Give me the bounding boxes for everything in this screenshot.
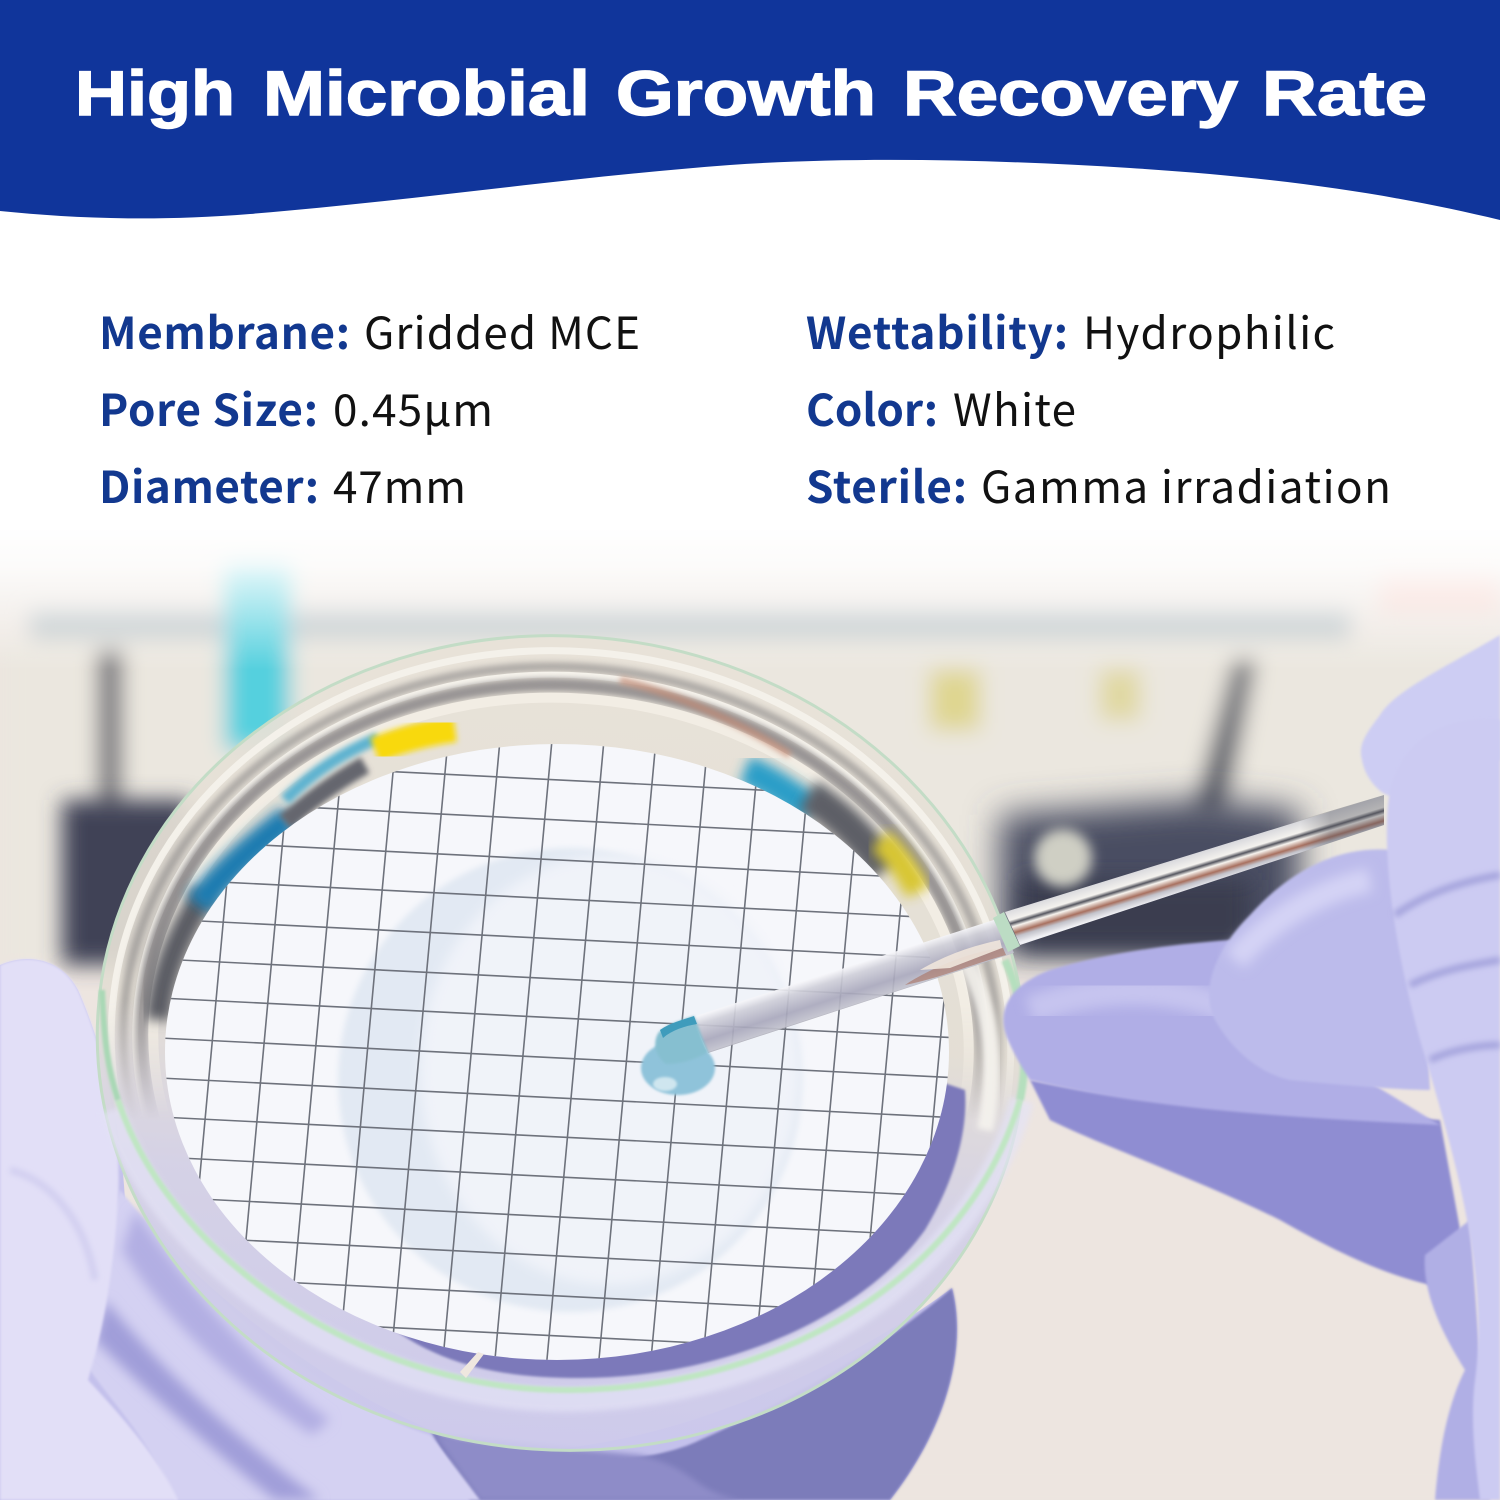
colored reflections in the rim (158, 893, 205, 1020)
spec: wettability: Wettability: (806, 298, 1068, 362)
spec: diameter: Diameter: (99, 452, 319, 516)
title: Microbial (263, 59, 590, 129)
spec: membrane: Gridded MCE (364, 298, 640, 362)
spec: wettability: Hydrophilic (1083, 298, 1335, 362)
title: Growth (616, 59, 876, 129)
spec: diameter (99, 452, 466, 516)
title: Rate (1262, 59, 1427, 129)
photo background: blurred laboratory (0, 525, 1500, 1500)
glass pipette (641, 795, 1384, 1095)
spec: diameter: 47mm (333, 452, 466, 516)
header banner (0, 0, 1500, 220)
upper glass streaks (108, 647, 1014, 1106)
dish rims (70, 605, 1052, 1481)
right glove (1003, 635, 1500, 1500)
thumb (1209, 849, 1430, 1090)
liquid droplet (641, 1041, 715, 1095)
large pale finger (1387, 719, 1500, 1500)
lower palm fingers (1030, 1080, 1462, 1288)
middle finger (1003, 940, 1440, 1125)
title (75, 59, 1427, 129)
spec: membrane: Membrane: (99, 298, 350, 362)
spec: pore size: 0.45μm (333, 375, 493, 439)
spec: pore size (99, 375, 493, 439)
tapered glass tube (692, 918, 1014, 1053)
petri dish (96, 634, 1032, 1452)
spec: color: Color: (806, 375, 938, 439)
specifications (99, 298, 1391, 516)
wet spot (338, 848, 802, 1312)
spec: membrane (99, 298, 640, 362)
glass shard reflection (460, 1352, 484, 1378)
green collar (993, 912, 1020, 952)
spec: sterile: Sterile: (806, 452, 967, 516)
knuckle (1361, 635, 1500, 796)
spec: color (806, 375, 1076, 439)
spec: color: White (953, 375, 1076, 439)
left glove under the dish (0, 959, 957, 1500)
membrane grid (165, 744, 949, 1360)
pipette rod (1005, 795, 1384, 945)
title: High (75, 59, 235, 129)
dish body (70, 605, 1052, 1481)
spec: wettability (806, 298, 1335, 362)
spec: sterile: Gamma irradiation (981, 452, 1391, 516)
dark reflection of fingers around the membrane (370, 1080, 965, 1378)
spec: pore size: Pore Size: (99, 375, 318, 439)
title: Recovery (903, 59, 1238, 129)
bottom finger (1425, 1220, 1490, 1500)
tip cap (655, 1016, 708, 1064)
membrane filter (165, 744, 949, 1360)
